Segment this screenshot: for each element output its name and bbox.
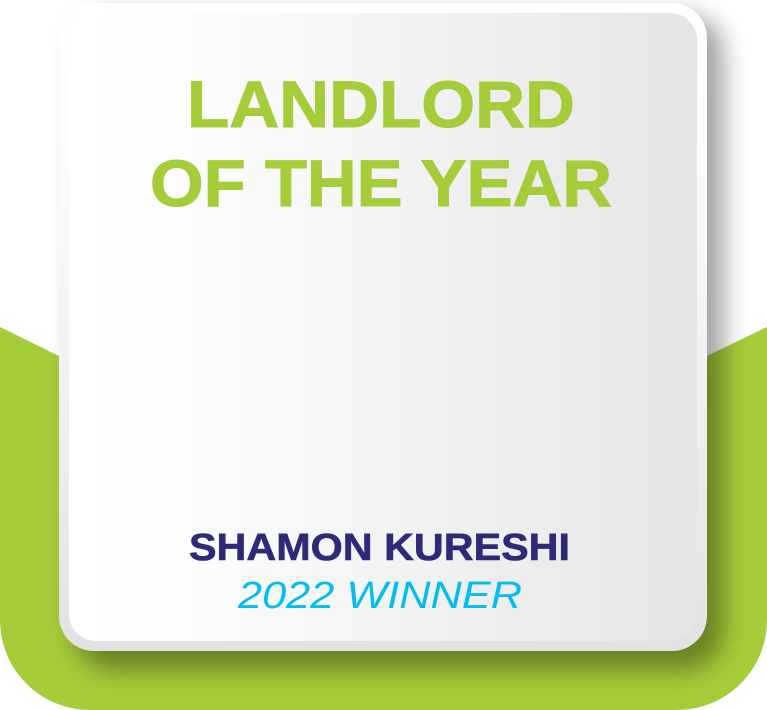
title xyxy=(150,67,612,220)
winner name: SHAMON KURESHI xyxy=(189,527,570,569)
award year: 2022 WINNER xyxy=(237,575,522,617)
award card xyxy=(59,3,707,651)
card rim xyxy=(59,3,707,651)
card face xyxy=(69,13,697,641)
green background shape xyxy=(0,327,767,710)
title line 2: OF THE YEAR xyxy=(150,146,612,220)
title line 1: LANDLORD xyxy=(187,67,575,141)
card drop shadow xyxy=(74,14,724,670)
